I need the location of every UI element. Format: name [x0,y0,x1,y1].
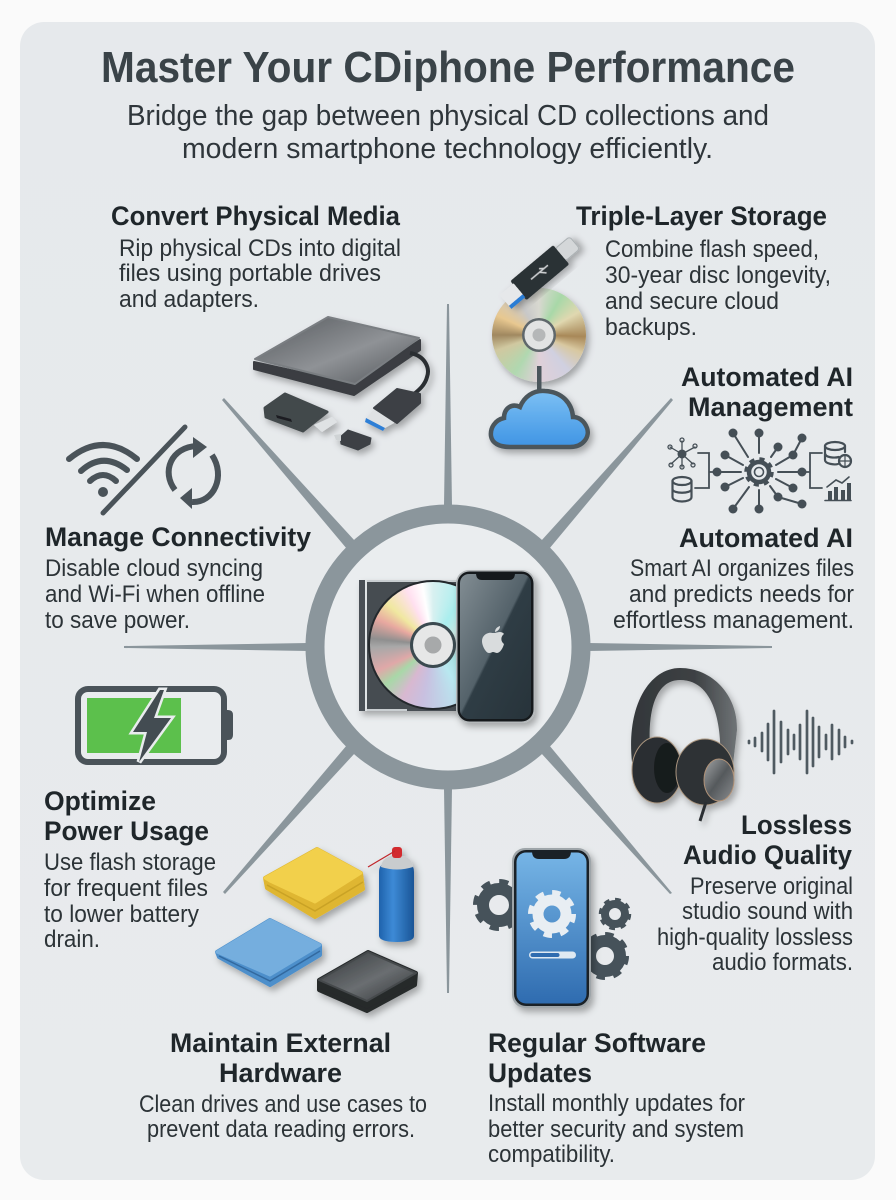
subtitle: Bridge the gap between physical CD collections and [127,100,769,132]
section: manage connectivity [45,522,311,634]
center hub ring [315,514,581,780]
section: optimize power usage: Optimize [44,786,156,816]
section: automated AI: effortless management. [613,607,854,634]
subtitle: modern smartphone technology efficiently. [182,133,713,165]
section: automated AI management heading: Automated AI [681,362,853,392]
icon: compressed air can [368,847,414,942]
section: regular software updates: compatibility. [488,1141,615,1168]
section: lossless audio quality: Audio Quality [683,840,852,870]
icon: battery [78,689,233,762]
section: manage connectivity: and Wi-Fi when offline [45,581,265,608]
section: automated AI: Automated AI [679,523,853,553]
section: automated AI management heading [681,362,853,422]
section: regular software updates [488,1028,745,1168]
section: automated AI management heading: Management [688,392,853,422]
section: automated AI [613,523,854,634]
section: manage connectivity: Disable cloud syncing [45,555,263,582]
section: manage connectivity: Manage Connectivity [45,522,311,552]
section: regular software updates: Updates [488,1058,592,1088]
section: regular software updates: Install monthly updates for [488,1090,745,1117]
icon: sound waveform [749,711,852,773]
icon: blue cloth [217,920,320,985]
section: maintain external hardware: Hardware [219,1058,342,1088]
section: manage connectivity: to save power. [45,607,190,634]
section: triple-layer storage [576,201,831,341]
section: optimize power usage: for frequent files [44,875,208,902]
icon: cleaning cloths, air can and drive [217,847,416,1011]
section: lossless audio quality: audio formats. [712,949,853,976]
icon: headphones [631,668,737,821]
section: lossless audio quality: Preserve original [690,873,853,900]
section: convert physical media: and adapters. [119,286,259,313]
section: triple-layer storage: Triple-Layer Storage [576,201,827,231]
section: convert physical media: Rip physical CDs into digital [119,235,401,262]
section: optimize power usage: drain. [44,926,100,953]
section: maintain external hardware: Maintain External [170,1028,391,1058]
subtitle [127,100,769,165]
section: regular software updates: better security and system [488,1116,744,1143]
section: optimize power usage: Power Usage [44,816,209,846]
section: convert physical media [111,201,401,313]
section: triple-layer storage: Combine flash speed, [605,236,819,263]
section: automated AI: Smart AI organizes files [630,555,854,582]
section: convert physical media: files using portable drives [119,260,381,287]
icon: portable CD drive and adapters [254,317,428,450]
section: triple-layer storage: and secure cloud [605,288,779,315]
section: optimize power usage: to lower battery [44,901,199,928]
section: triple-layer storage: backups. [605,314,697,341]
section: lossless audio quality: Lossless [741,810,852,840]
section: lossless audio quality: high-quality lossless [657,924,853,951]
section: lossless audio quality [657,810,853,976]
icon: apple logo [482,626,504,653]
section: convert physical media: Convert Physical Media [111,201,401,231]
section: optimize power usage [44,786,216,953]
icon: wifi and sync disabled [69,427,218,513]
icon: CD case and smartphone [359,570,535,723]
icon: flash drive, disc and cloud [491,234,588,447]
section: regular software updates: Regular Software [488,1028,706,1058]
icon: yellow cloth [265,849,363,917]
section: optimize power usage: Use flash storage [44,849,216,876]
hub spokes [124,304,772,993]
section: automated AI: and predicts needs for [629,581,854,608]
title: Master Your CDiphone Performance [101,43,795,92]
section: maintain external hardware: prevent data reading errors. [147,1116,415,1143]
icon: phone with gears [476,848,630,1008]
icon: black external drive [319,952,416,1011]
section: maintain external hardware: Clean drives and use cases to [139,1091,427,1118]
icon: AI network [668,428,851,514]
section: maintain external hardware [139,1028,427,1143]
section: triple-layer storage: 30-year disc longevity, [605,262,831,289]
section: lossless audio quality: studio sound with [682,898,853,925]
